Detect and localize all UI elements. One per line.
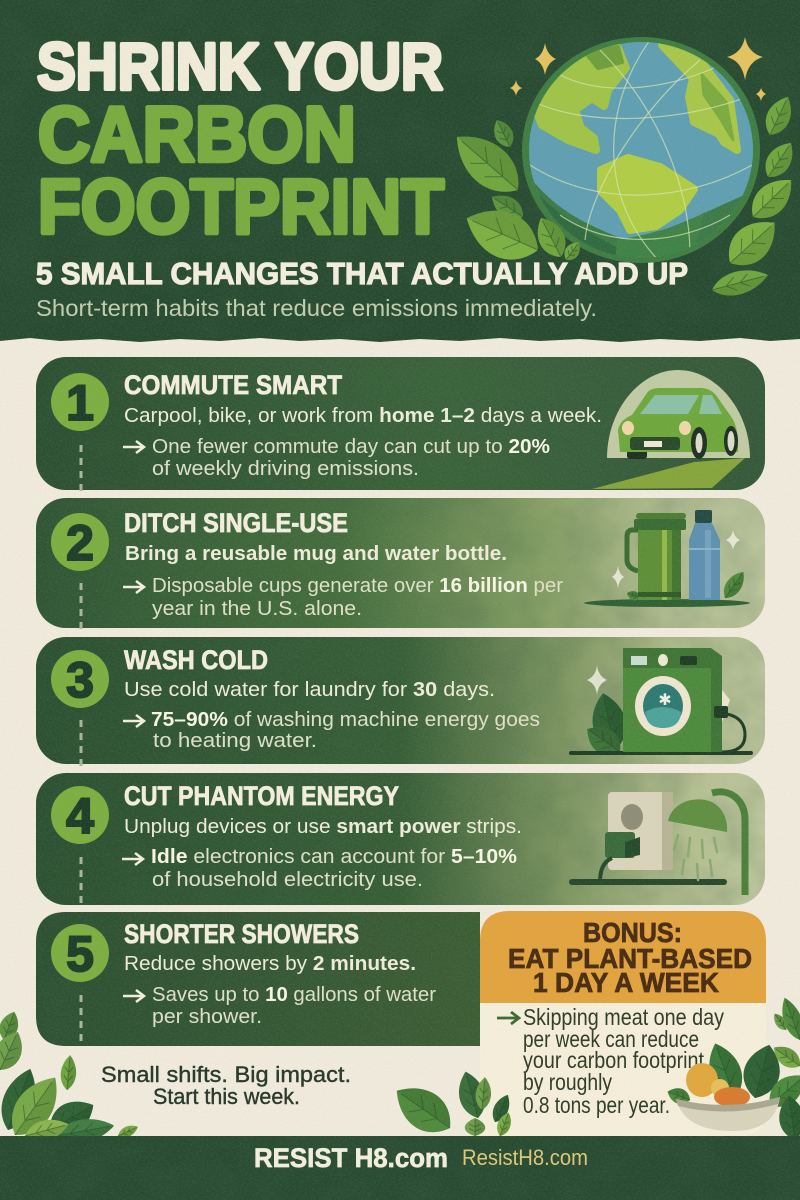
- arrow note: per shower.: [152, 1006, 262, 1028]
- bonus heading: [508, 917, 752, 998]
- footer band: [0, 1136, 800, 1200]
- icon: right edge foliage: [769, 995, 800, 1142]
- closing message: Start this week.: [153, 1084, 300, 1109]
- icon: header leaves: [443, 92, 800, 301]
- heading: SHORTER SHOWERS: [124, 919, 359, 949]
- icon: green car: [592, 370, 750, 489]
- icon: washing machine: ✱: [658, 692, 672, 709]
- closing message: Small shifts. Big impact.: [101, 1062, 351, 1087]
- bonus text: [523, 1004, 724, 1118]
- footer brand: RESIST H8.com: [254, 1143, 448, 1173]
- icon: washing machine: [569, 648, 753, 762]
- arrow note: Saves up to 10 gallons of water: [152, 984, 436, 1006]
- arrow note: of weekly driving emissions.: [152, 458, 419, 480]
- arrow note: [123, 575, 563, 620]
- icon: earth globe with leaves: [520, 37, 760, 270]
- closing message: [101, 1062, 351, 1109]
- icon: bottom left foliage: [0, 1009, 140, 1147]
- footer url: ResistH8.com: [462, 1145, 588, 1170]
- title line: shrink your: SHRINK YOUR: [37, 29, 443, 103]
- bonus text: 0.8 tons per year.: [523, 1092, 670, 1118]
- panel: step 3 wash cold: [36, 637, 765, 769]
- arrow: [497, 1012, 519, 1024]
- arrow note: of household electricity use.: [152, 869, 423, 891]
- header title: [37, 29, 444, 250]
- bonus heading: EAT PLANT-BASED: [508, 943, 752, 974]
- bonus text: your carbon footprint: [523, 1047, 705, 1073]
- icon: reusable mug and water bottle: [584, 510, 750, 607]
- subtitle heading: 5 SMALL CHANGES THAT ACTUALLY ADD UP: [36, 256, 688, 291]
- body text: Carpool, bike, or work from home 1–2 days a week.: [124, 405, 602, 427]
- panel: step 5 shorter showers: [36, 912, 480, 1046]
- bonus text: Skipping meat one day: [523, 1004, 724, 1030]
- arrow note: Idle electronics can account for 5–10%: [151, 846, 517, 868]
- arrow note: [123, 709, 540, 752]
- bonus heading: BONUS:: [583, 917, 682, 948]
- icon: sparkles: [510, 37, 766, 101]
- bonus text: per week can reduce: [523, 1026, 699, 1052]
- icon: number 2: 2: [66, 515, 94, 571]
- arrow note: [122, 846, 517, 891]
- arrow note: to heating water.: [153, 730, 317, 752]
- icon: number 5: 5: [66, 926, 94, 982]
- arrow note: year in the U.S. alone.: [152, 598, 362, 620]
- connector dashes: [80, 720, 82, 769]
- connector dashes: [80, 857, 82, 906]
- icon: number 1: [51, 373, 109, 431]
- icon: bowl of greens and vegetables: [665, 1038, 800, 1131]
- heading: COMMUTE SMART: [124, 370, 342, 400]
- icon: number 4: [51, 786, 109, 844]
- body text: Reduce showers by 2 minutes.: [124, 953, 416, 975]
- bonus text: by roughly: [523, 1069, 612, 1095]
- arrow note: [123, 436, 550, 480]
- icon: number 1: 1: [66, 375, 94, 431]
- connector dashes: [80, 583, 82, 632]
- arrow note: 75–90% of washing machine energy goes: [151, 709, 540, 731]
- icon: bottom middle foliage: [386, 1068, 515, 1144]
- title line: footprint: FOOTPRINT: [38, 164, 444, 250]
- panel: step 2 ditch single-use: [36, 498, 765, 632]
- connector dashes: [80, 445, 82, 494]
- arrow note: Disposable cups generate over 16 billion per: [152, 575, 563, 597]
- title line: carbon: CARBON: [38, 90, 356, 178]
- header: dark green band: [0, 0, 800, 342]
- panel: bonus: [480, 911, 766, 1136]
- icon: number 3: 3: [66, 652, 94, 708]
- heading: CUT PHANTOM ENERGY: [124, 781, 399, 811]
- arrow note: [123, 984, 436, 1028]
- icon: number 5: [51, 924, 109, 982]
- tagline: Short-term habits that reduce emissions immediately.: [36, 295, 597, 321]
- connector dashes: [80, 995, 82, 1042]
- icon: number 2: [51, 513, 109, 571]
- icon: number 3: [51, 650, 109, 708]
- panel: step 4 cut phantom energy: [36, 773, 765, 906]
- arrow note: One fewer commute day can cut up to 20%: [152, 436, 550, 458]
- icon: number 4: 4: [66, 788, 94, 844]
- body text: Bring a reusable mug and water bottle.: [125, 543, 507, 565]
- body text: Unplug devices or use smart power strips.: [124, 816, 522, 838]
- icon: socket and shower head: [569, 792, 745, 895]
- panel: step 1 commute smart: [36, 357, 765, 494]
- body text: Use cold water for laundry for 30 days.: [124, 679, 495, 701]
- bonus heading: 1 DAY A WEEK: [533, 967, 719, 998]
- heading: DITCH SINGLE-USE: [124, 508, 348, 538]
- heading: WASH COLD: [124, 645, 268, 675]
